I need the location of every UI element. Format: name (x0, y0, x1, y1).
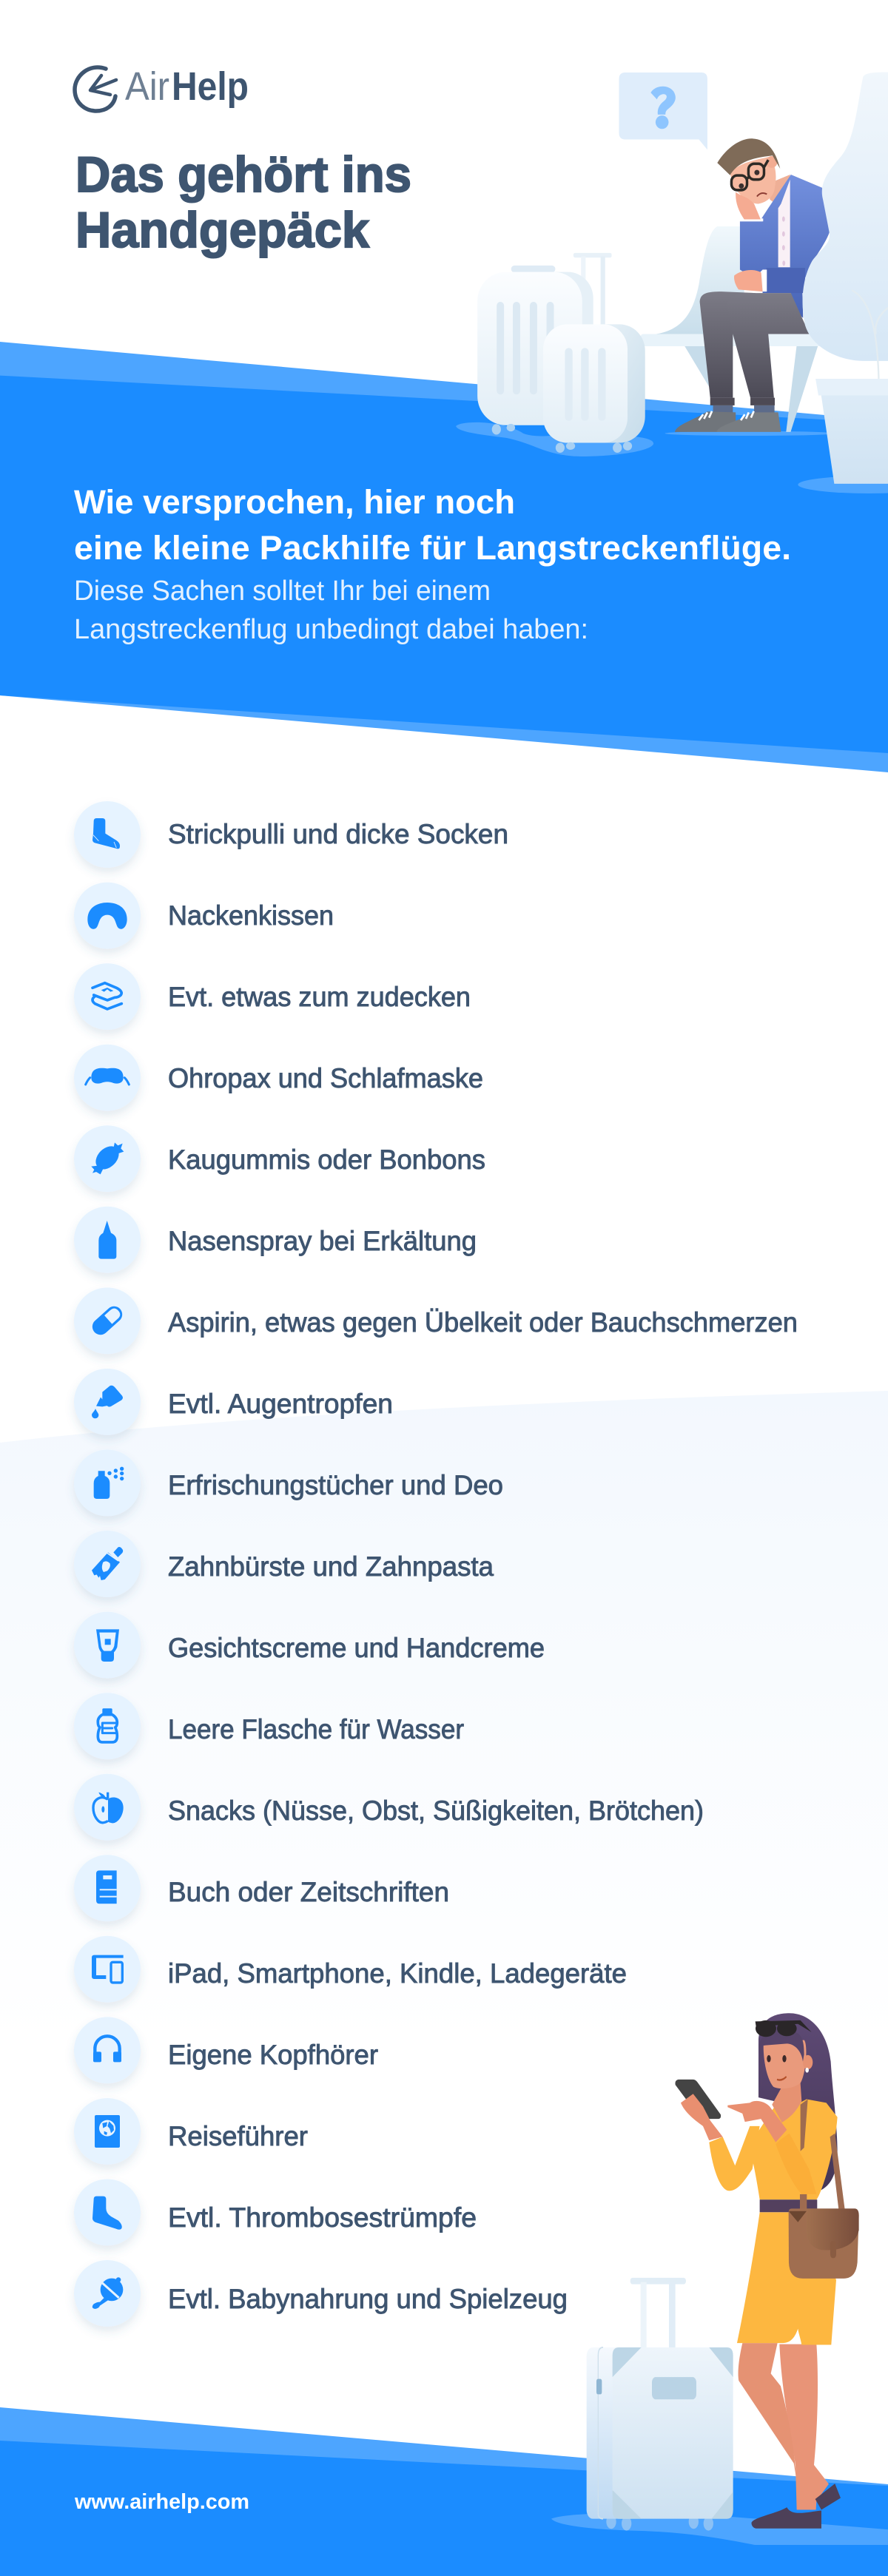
intro text: Langstreckenflug unbedingt dabei haben: (74, 614, 588, 645)
icon: blanket (74, 963, 141, 1030)
footer band: light blue layer (0, 2407, 888, 2576)
small suitcase (543, 324, 645, 453)
suitcase (587, 2278, 733, 2531)
hand on face (736, 192, 761, 219)
icon: devices (74, 1936, 141, 2003)
bag strap (800, 2100, 845, 2211)
ear and earring (803, 2055, 813, 2073)
logo (75, 64, 249, 111)
icon: bottle (74, 1693, 141, 1759)
illustration: worried man on bench with suitcases and plant (456, 73, 888, 493)
icon: headphones (74, 2017, 141, 2083)
rear leg (779, 2344, 829, 2510)
cuff (740, 218, 763, 221)
intro text: Diese Sachen solltet Ihr bei einem (74, 576, 491, 607)
front leg (727, 293, 810, 398)
item: Kaugummis oder Bonbons (74, 1125, 485, 1192)
woman (675, 2013, 859, 2529)
mouth (757, 193, 767, 197)
pale background wave (0, 1391, 888, 2042)
label: Zahnbürste und Zahnpasta (168, 1551, 494, 1582)
shoes (675, 411, 781, 432)
label: Evt. etwas zum zudecken (168, 982, 471, 1012)
pot (821, 395, 888, 484)
item: Strickpulli und dicke Socken (74, 801, 508, 868)
label: Strickpulli und dicke Socken (168, 819, 508, 849)
label: Nasenspray bei Erkältung (168, 1226, 477, 1256)
label: Aspirin, etwas gegen Übelkeit oder Bauchschmerzen (168, 1307, 798, 1338)
label: Evtl. Thrombosestrümpfe (168, 2202, 477, 2233)
fist (734, 270, 763, 291)
icon: travel guide (74, 2098, 141, 2165)
hair front (758, 2031, 804, 2090)
item: Zahnbürste und Zahnpasta (74, 1531, 494, 1597)
intro heading: eine kleine Packhilfe für Langstreckenflüge. (74, 529, 791, 567)
face (764, 2040, 806, 2088)
label: Nackenkissen (168, 900, 334, 931)
label: Evtl. Babynahrung und Spielzeug (168, 2284, 568, 2314)
big suitcase (477, 253, 612, 434)
icon: compression sock (74, 2179, 141, 2246)
pointing arm (727, 2101, 787, 2142)
trouser cuffs and socks (710, 398, 775, 413)
item: Evt. etwas zum zudecken (74, 963, 471, 1030)
sleeve left (709, 2126, 760, 2191)
icon: pill (74, 1287, 141, 1354)
shoe back (815, 2484, 841, 2510)
intro text (74, 576, 588, 645)
glasses (731, 160, 768, 190)
label: Erfrischungstücher und Deo (168, 1470, 503, 1500)
icon: apple (74, 1774, 141, 1841)
hand with phone (681, 2094, 723, 2140)
pot rim (815, 379, 888, 395)
shirt (778, 180, 790, 267)
icon: sock (74, 801, 141, 868)
footer url: www.airhelp.com (74, 2490, 249, 2514)
header band: blue layer (0, 376, 888, 753)
item: Gesichtscreme und Handcreme (74, 1612, 545, 1679)
man (675, 138, 830, 432)
belt (760, 2199, 817, 2212)
neck and collar (770, 175, 790, 208)
item: Eigene Kopfhörer (74, 2017, 378, 2083)
item: iPad, Smartphone, Kindle, Ladegeräte (74, 1936, 627, 2003)
hair (717, 138, 780, 175)
floor shadow: plant (798, 476, 888, 493)
packing list (74, 801, 798, 2327)
back leg (700, 291, 756, 398)
label: Snacks (Nüsse, Obst, Süßigkeiten, Brötchen) (168, 1796, 704, 1826)
item: Evtl. Augentropfen (74, 1369, 393, 1435)
mouth (777, 2077, 787, 2080)
icon: rattle (74, 2260, 141, 2327)
item: Erfrischungstücher und Deo (74, 1450, 503, 1517)
label: iPad, Smartphone, Kindle, Ladegeräte (168, 1958, 627, 1989)
footer band: blue layer (0, 2441, 888, 2576)
item: Evtl. Thrombosestrümpfe (74, 2179, 477, 2246)
bodice (749, 2100, 838, 2199)
speech bubble (619, 73, 707, 149)
label: Gesichtscreme und Handcreme (168, 1633, 545, 1663)
eyes (767, 2055, 787, 2063)
icon: airhelp clock plane (75, 67, 116, 111)
icon: candy (74, 1125, 141, 1192)
item: Aspirin (74, 1287, 798, 1354)
item: Ohropax und Schlafmaske (74, 1045, 483, 1111)
intro heading: Wie versprochen, hier noch (74, 483, 515, 521)
stem (852, 290, 888, 379)
wordmark: Help (172, 64, 249, 109)
item: Reiseführer (74, 2098, 308, 2165)
jacket (740, 175, 830, 318)
diagonal leg (739, 2343, 796, 2478)
title (75, 146, 411, 258)
illustration: woman with phone, bag and suitcase (551, 2013, 888, 2545)
wordmark: Air (125, 64, 169, 109)
floor shadow: man (665, 431, 835, 436)
label: Kaugummis oder Bonbons (168, 1144, 485, 1175)
label: Ohropax und Schlafmaske (168, 1063, 483, 1093)
hair back (758, 2013, 838, 2191)
floor shadow (551, 2513, 888, 2545)
icon: neck pillow (74, 883, 141, 949)
title: Das gehört ins (75, 146, 411, 203)
item: Nackenkissen (74, 883, 334, 949)
icon: eye drops (74, 1369, 141, 1435)
icon: book (74, 1855, 141, 1921)
label: Eigene Kopfhörer (168, 2040, 378, 2070)
phone (675, 2080, 721, 2119)
neck (772, 2083, 801, 2122)
shoe front (751, 2507, 821, 2529)
plant (803, 73, 888, 484)
icon: toothpaste (74, 1531, 141, 1597)
floor shadow: suitcases (456, 422, 653, 456)
label: Evtl. Augentropfen (168, 1389, 393, 1419)
sunglasses (756, 2020, 812, 2037)
bag (789, 2208, 859, 2279)
head (730, 157, 776, 203)
leaves (803, 73, 888, 361)
bench (641, 226, 822, 432)
item: Snacks (74, 1774, 704, 1841)
icon: deodorant spray (74, 1450, 141, 1517)
intro heading (74, 483, 791, 567)
item: Nasenspray bei Erkältung (74, 1207, 477, 1273)
icon: nasal spray (74, 1207, 141, 1273)
item: Evtl. Babynahrung und Spielzeug (74, 2260, 568, 2327)
item: Buch oder Zeitschriften (74, 1855, 449, 1921)
label: Reiseführer (168, 2121, 308, 2151)
label: Leere Flasche für Wasser (168, 1714, 464, 1744)
title: Handgepäck (75, 202, 369, 258)
label: Buch oder Zeitschriften (168, 1877, 449, 1907)
sleeve right (776, 2134, 816, 2194)
question mark (650, 87, 676, 129)
skirt (737, 2212, 836, 2345)
icon: sleep mask (74, 1045, 141, 1111)
item: Leere Flasche für Wasser (74, 1693, 464, 1759)
icon: cream tube (74, 1612, 141, 1679)
header band: light blue layer (0, 342, 888, 772)
